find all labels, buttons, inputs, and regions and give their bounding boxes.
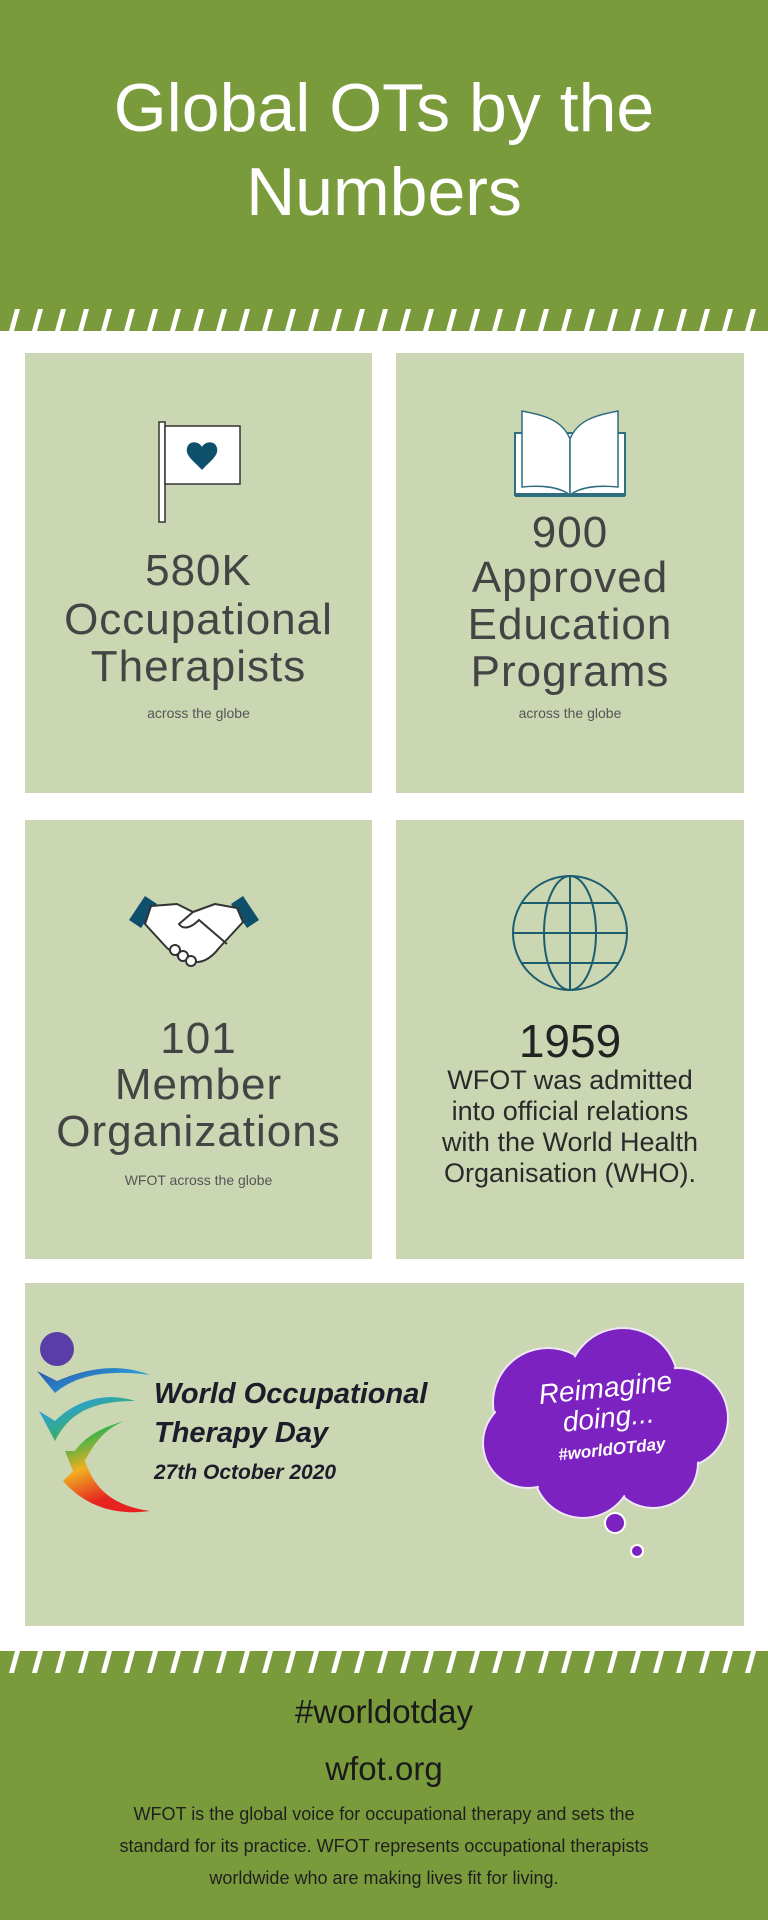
panel: WHO relations (396, 820, 744, 1259)
panel: WHO relations: with the World Health (442, 1127, 698, 1157)
icon: flag with heart (158, 421, 241, 523)
event title (154, 1378, 428, 1449)
footer band (0, 1651, 768, 1920)
title: Numbers (246, 154, 522, 230)
stat text: 900 (532, 508, 608, 557)
panel: education programs: Programs (471, 647, 669, 696)
description: worldwide who are making lives fit for living. (209, 1868, 559, 1888)
icon: globe (512, 875, 628, 991)
description: standard for its practice. WFOT represents occupational therapists (120, 1836, 648, 1856)
stat text: 1959 (519, 1015, 621, 1067)
logo: figure (37, 1332, 150, 1512)
header band (0, 0, 768, 331)
panel: WHO relations: into official relations (452, 1096, 688, 1126)
stat text: 580K (145, 546, 252, 595)
hashtag: #worldotday (295, 1693, 473, 1730)
callout: thought cloud: #worldOTday (557, 1434, 668, 1464)
event title: Therapy Day (154, 1417, 328, 1449)
callout: thought cloud (482, 1327, 729, 1558)
panel: education programs (396, 353, 744, 793)
event title: World Occupational (154, 1378, 427, 1410)
callout: thought cloud: doing... (561, 1397, 656, 1438)
panel: occupational therapists: across the globe (147, 705, 250, 721)
title: Global OTs by the (114, 70, 654, 146)
panel: education programs: across the globe (519, 705, 621, 721)
description (120, 1804, 648, 1888)
description: WFOT is the global voice for occupational therapy and sets the (134, 1804, 634, 1824)
panel: member organizations: WFOT across the globe (125, 1172, 272, 1188)
panel: education programs: Education (468, 600, 672, 649)
stat text: 101 (160, 1014, 237, 1063)
icon: handshake (129, 896, 259, 967)
title (114, 70, 654, 230)
panel: WHO relations: WFOT was admitted (447, 1065, 693, 1095)
event date: 27th October 2020 (154, 1461, 336, 1484)
panel: member organizations: Organizations (56, 1107, 341, 1156)
icon: open book (514, 410, 626, 497)
panel: occupational therapists (25, 353, 372, 793)
panel: education programs: Approved (472, 553, 668, 602)
website: wfot.org (325, 1750, 443, 1787)
callout: thought cloud: Reimagine (537, 1365, 674, 1410)
panel: world OT day banner (25, 1283, 744, 1626)
panel: occupational therapists: Occupational (64, 595, 333, 644)
panel: WHO relations: Organisation (WHO). (444, 1158, 696, 1188)
panel: member organizations (25, 820, 372, 1259)
panel: occupational therapists: Therapists (91, 642, 306, 691)
panel: member organizations: Member (115, 1060, 282, 1109)
